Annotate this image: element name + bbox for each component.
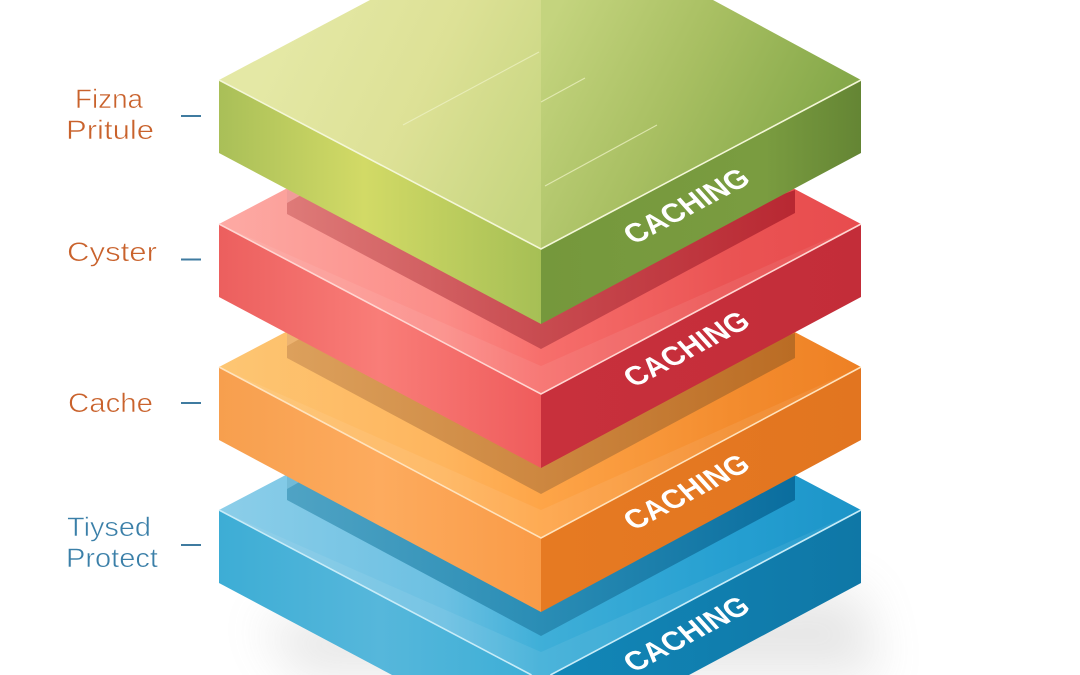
label: Tiysed Protect: Tiysed: [67, 512, 151, 542]
label: Fizna Pritule: Pritule: [66, 115, 154, 145]
connector dash 4: [181, 544, 201, 546]
layer: blue slab: [219, 341, 861, 675]
side label: orange: CACHING: [616, 448, 757, 536]
drop shadow under the stack: [260, 590, 880, 675]
top-face highlight lines: [403, 52, 657, 186]
label: Tiysed Protect: Protect: [66, 543, 159, 573]
layer: red slab: [219, 55, 861, 468]
shadow cast on orange layer: [287, 333, 795, 494]
connector dash 1: [181, 115, 201, 117]
shadow cast on blue layer: [287, 476, 795, 636]
side label: green: CACHING: [616, 162, 757, 250]
label: Cache: Cache: [68, 388, 153, 418]
connector dash 3: [181, 402, 201, 404]
layer: green slab: [219, 0, 861, 324]
shadow cast on red layer: [287, 190, 795, 349]
label: Fizna Pritule: Fizna: [75, 84, 144, 114]
label: Fizna Pritule: [66, 84, 154, 145]
side label: red: CACHING: [616, 305, 757, 393]
connector dash 2: [181, 258, 201, 260]
layer: orange slab: [219, 198, 861, 612]
label: Cyster: Cyster: [67, 237, 157, 267]
label: Tiysed Protect: [66, 512, 159, 573]
